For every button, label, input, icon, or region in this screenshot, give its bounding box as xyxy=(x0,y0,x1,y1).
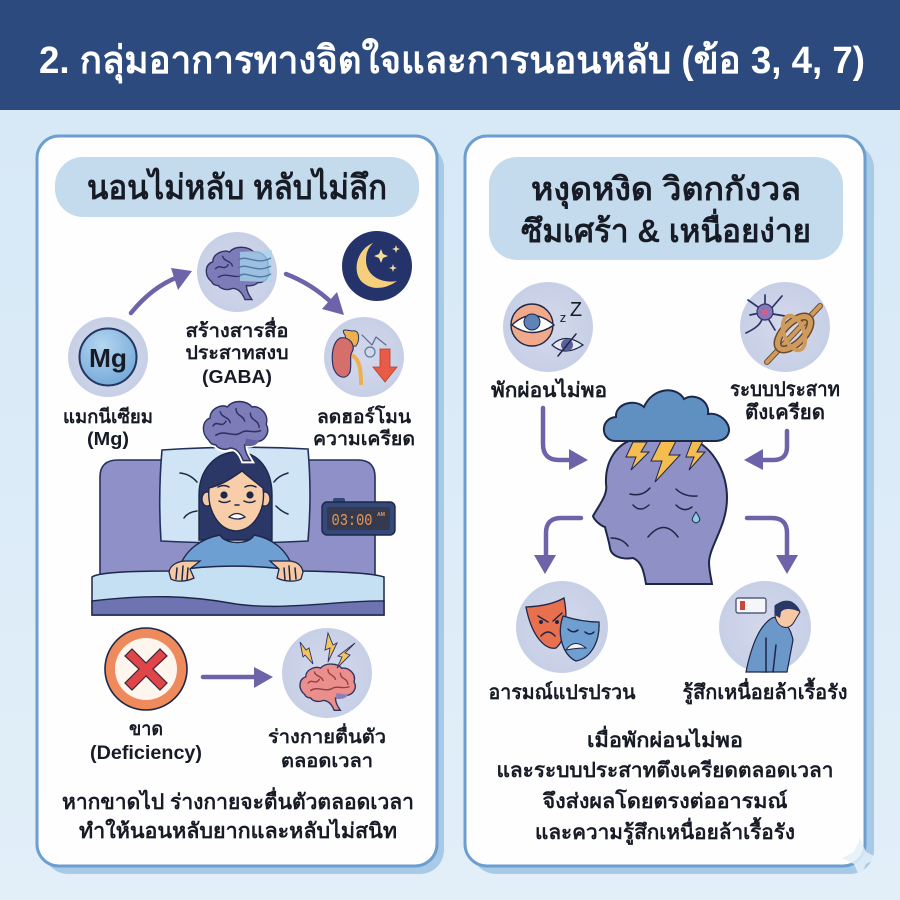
arrow: GABA to hormone xyxy=(286,274,344,315)
summary text: insomnia: หากขาดไป ร่างกายจะตื่นตัวตลอดเวลา xyxy=(62,786,414,814)
icon: corner sparkle xyxy=(842,838,878,878)
icon: tired eye: Z xyxy=(570,299,582,321)
summary text: mood and fatigue xyxy=(496,725,834,846)
label: deficiency: (Deficiency) xyxy=(90,743,202,764)
panel heading: insomnia xyxy=(55,157,419,217)
label: magnesium xyxy=(63,406,153,449)
icon: kidney and hormone decrease xyxy=(324,317,404,397)
label: GABA: ประสาทสงบ xyxy=(186,343,288,364)
icon: magnesium: Mg xyxy=(89,343,127,373)
icon: alert brain xyxy=(282,628,372,718)
thought brain xyxy=(203,402,268,461)
icon: tired eye: z xyxy=(560,310,566,325)
illustration: awake person in bed xyxy=(92,402,395,615)
arrow: rest to head xyxy=(543,408,588,470)
arrow: head to fatigue xyxy=(747,518,798,574)
arrow: deficiency to alert xyxy=(203,667,273,688)
label: nervous tension: ตึงเครียด xyxy=(745,401,825,424)
label: GABA: สร้างสารสื่อ xyxy=(186,317,288,342)
icon: brain with waves xyxy=(197,232,277,312)
panel heading: mood and fatigue xyxy=(489,157,843,260)
summary text: mood and fatigue: และความรู้สึกเหนื่อยล้าเรื้อรัง xyxy=(535,816,795,846)
summary text: mood and fatigue: เมื่อพักผ่อนไม่พอ xyxy=(587,725,743,752)
icon: neuron and knot xyxy=(740,282,830,372)
summary text: mood and fatigue: จึงส่งผลโดยตรงต่ออารมณ์ xyxy=(542,788,788,813)
blanket xyxy=(92,566,384,615)
icon: tired eye xyxy=(503,282,593,372)
label: magnesium: แมกนีเซียม xyxy=(63,406,153,428)
summary text: insomnia xyxy=(62,786,414,843)
alarm clock xyxy=(322,498,395,535)
label: GABA xyxy=(186,317,288,387)
label: nervous tension xyxy=(730,379,840,424)
label: reduce stress hormone: ความเครียด xyxy=(313,428,415,450)
icon: drama masks xyxy=(516,581,608,673)
label: mood swings: อารมณ์แปรปรวน xyxy=(488,681,636,704)
label: always alert: ร่างกายตื่นตัว xyxy=(268,723,386,748)
summary text: insomnia: ทำให้นอนหลับยากและหลับไม่สนิท xyxy=(79,818,397,843)
panel heading: mood and fatigue: หงุดหงิด วิตกกังวล xyxy=(531,171,801,210)
label: nervous tension: ระบบประสาท xyxy=(730,379,840,401)
illustration: head with storm cloud xyxy=(593,390,729,584)
summary text: mood and fatigue: และระบบประสาทตึงเครียดตลอดเวลา xyxy=(496,759,834,782)
shirt xyxy=(178,535,294,572)
label: reduce stress hormone xyxy=(313,405,415,450)
arrow: head to mood xyxy=(534,518,581,574)
face lines xyxy=(611,488,697,546)
label: always alert: ตลอดเวลา xyxy=(281,751,373,772)
tear xyxy=(692,512,700,523)
title: 2. กลุ่มอาการทางจิตใจและการนอนหลับ (ข้อ 3, 4, 7) xyxy=(39,38,865,84)
icon: deficiency X xyxy=(105,628,187,710)
label: magnesium: (Mg) xyxy=(87,428,129,449)
icon: exhausted person and battery xyxy=(719,581,811,673)
label: deficiency xyxy=(90,719,202,764)
icon: magnesium xyxy=(68,317,148,397)
label: reduce stress hormone: ลดฮอร์โมน xyxy=(317,405,411,428)
hair xyxy=(199,452,272,540)
hands xyxy=(169,561,200,581)
headboard xyxy=(100,460,375,577)
label: chronic fatigue: รู้สึกเหนื่อยล้าเรื้อรัง xyxy=(682,677,848,706)
label: GABA: (GABA) xyxy=(202,366,272,387)
label: always alert xyxy=(268,723,386,772)
arrow: tension to head xyxy=(744,431,787,470)
alarm clock: 03:00 xyxy=(332,512,372,531)
cloud xyxy=(604,390,729,441)
icon: moon and stars xyxy=(342,231,412,301)
arrow: magnesium to GABA xyxy=(131,268,192,313)
head xyxy=(593,438,727,584)
label: deficiency: ขาด xyxy=(129,719,163,740)
header banner xyxy=(0,0,900,110)
panel heading: insomnia: นอนไม่หลับ หลับไม่ลึก xyxy=(87,167,387,207)
panel: mood and fatigue xyxy=(465,136,874,874)
face xyxy=(202,471,270,531)
alarm clock: AM xyxy=(377,512,385,518)
pillows xyxy=(160,447,310,543)
panel heading: mood and fatigue: ซึมเศร้า & เหนื่อยง่าย xyxy=(521,208,811,249)
panel: insomnia xyxy=(37,136,444,874)
label: insufficient rest: พักผ่อนไม่พอ xyxy=(491,378,607,402)
lightning xyxy=(626,441,705,482)
